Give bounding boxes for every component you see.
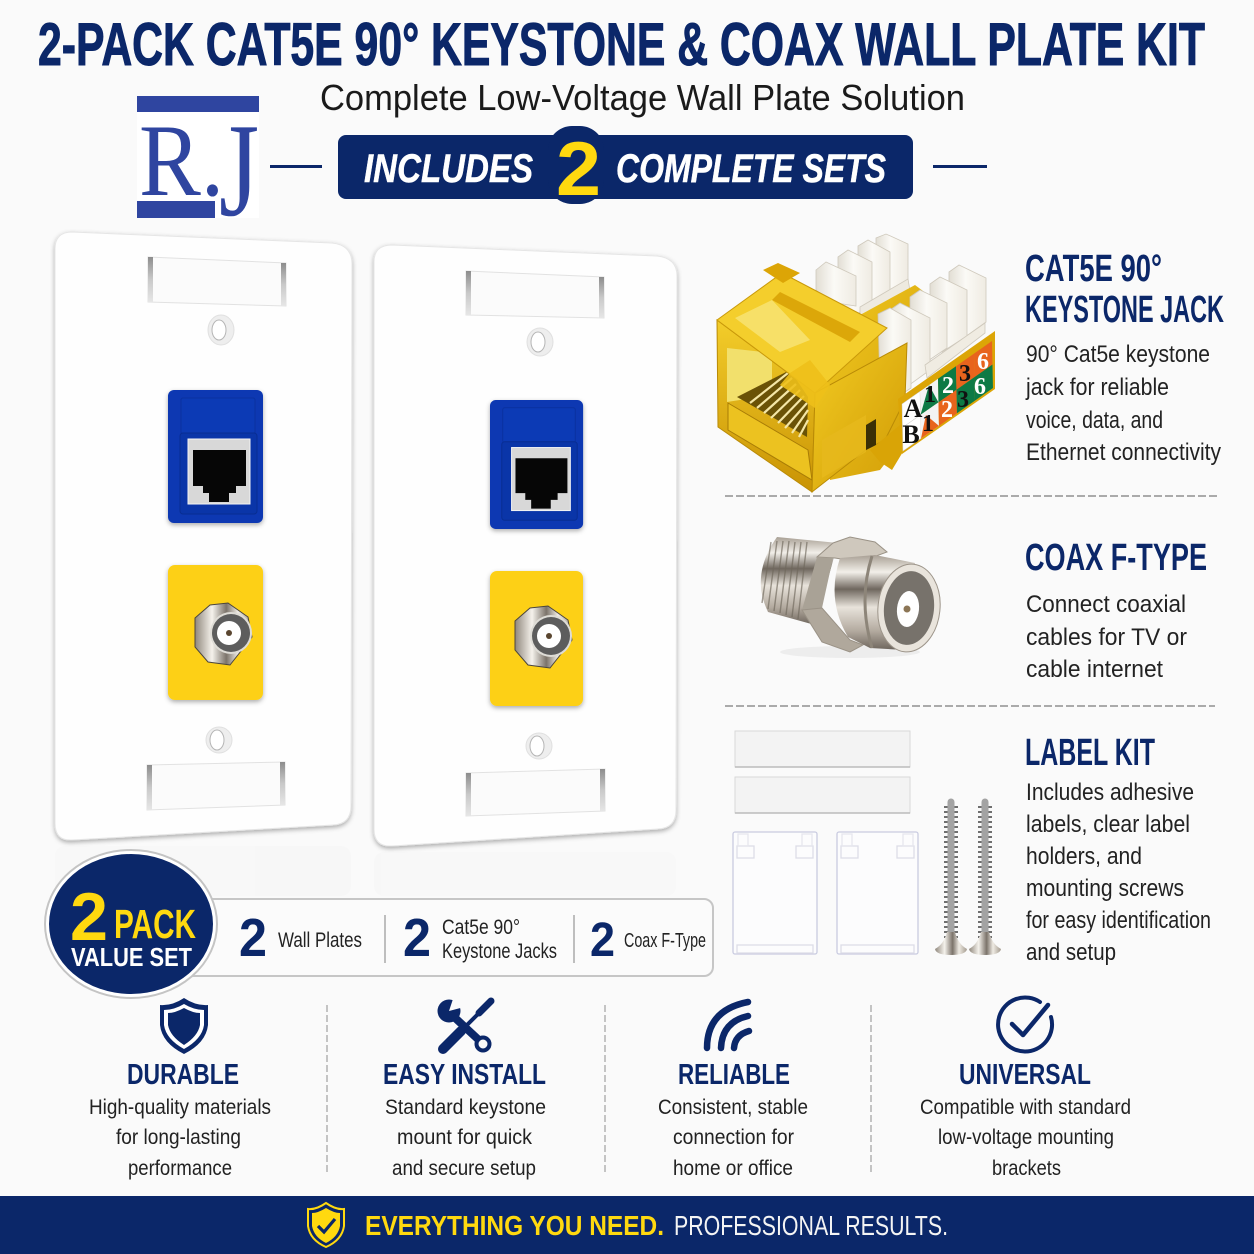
icon: wrench and screwdriver bbox=[438, 996, 491, 1050]
footer text bbox=[365, 1210, 948, 1241]
rear white punch-down blocks bbox=[816, 234, 910, 319]
item: keystone jacks: Cat5e 90° bbox=[442, 916, 520, 939]
banner: includes 2 complete sets bbox=[270, 126, 987, 212]
wiring label strip: A bbox=[904, 394, 923, 423]
text: Consistent, stable bbox=[658, 1096, 808, 1119]
item: wall plates: Wall Plates bbox=[278, 929, 362, 952]
heading: UNIVERSAL bbox=[959, 1059, 1091, 1091]
blue keystone jack bbox=[490, 400, 583, 529]
jack rear body bbox=[815, 285, 935, 480]
icon: signal waves bbox=[707, 1002, 749, 1048]
text: coax description: cable internet bbox=[1026, 656, 1163, 683]
feature: universal bbox=[920, 997, 1131, 1180]
illustration: clear label holders bbox=[733, 832, 918, 954]
lower front sill bbox=[728, 403, 812, 480]
front face with opening bbox=[717, 320, 815, 492]
item: keystone jacks: 2 bbox=[403, 908, 431, 968]
wiring label strip: 3 bbox=[959, 361, 971, 387]
text: Compatible with standard bbox=[920, 1096, 1131, 1119]
top face bbox=[717, 273, 887, 393]
cylinder body bbox=[835, 555, 915, 650]
screw hole top bbox=[208, 315, 234, 345]
front white punch-down blocks bbox=[878, 265, 986, 392]
heading: label kit: LABEL KIT bbox=[1025, 732, 1155, 774]
wiring label strip: 6 bbox=[977, 349, 989, 375]
illustration: coax F-type connector bbox=[761, 537, 944, 658]
label window bottom bbox=[147, 762, 285, 810]
item: wall plates bbox=[239, 908, 362, 968]
text bbox=[89, 1096, 271, 1180]
right side wall bbox=[812, 343, 907, 492]
text bbox=[385, 1096, 546, 1180]
item: coax F-type: 2 bbox=[590, 914, 615, 967]
blue keystone jack bbox=[168, 390, 263, 523]
item: coax F-type: Coax F-Type bbox=[624, 930, 706, 952]
text: and secure setup bbox=[392, 1157, 536, 1180]
text: Standard keystone bbox=[385, 1096, 546, 1119]
banner: includes 2 complete sets: COMPLETE SETS bbox=[616, 147, 886, 191]
subtitle: Complete Low-Voltage Wall Plate Solution bbox=[320, 77, 965, 118]
threaded barrel bbox=[761, 537, 838, 625]
item: keystone jacks: Keystone Jacks bbox=[442, 940, 557, 963]
wall plate 1 bbox=[55, 232, 352, 840]
text: label kit description bbox=[1026, 779, 1211, 966]
wiring label strip: 6 bbox=[974, 374, 986, 400]
label window bottom bbox=[466, 769, 605, 816]
illustration: adhesive labels bbox=[735, 731, 910, 813]
icon: shield bbox=[160, 998, 208, 1054]
text: keystone jack description: jack for reliable bbox=[1025, 374, 1169, 401]
text: label kit description: for easy identification bbox=[1026, 907, 1211, 934]
text: label kit description: mounting screws bbox=[1026, 875, 1184, 902]
panel: kit contents bar bbox=[150, 899, 713, 976]
text: keystone jack description: Ethernet connectivity bbox=[1026, 439, 1221, 466]
label window top bbox=[148, 257, 286, 306]
item: keystone jacks bbox=[403, 908, 557, 968]
faint plate reflection bbox=[55, 846, 676, 896]
text: keystone jack description bbox=[1025, 341, 1221, 466]
footer text: EVERYTHING YOU NEED. bbox=[365, 1210, 664, 1241]
text: coax description: Connect coaxial bbox=[1026, 591, 1186, 618]
text: keystone jack description: voice, data, and bbox=[1026, 407, 1163, 434]
logo: R.J: R. bbox=[139, 104, 224, 218]
wiring label strip bbox=[898, 331, 995, 454]
banner: includes 2 complete sets: INCLUDES bbox=[364, 147, 533, 191]
hex nut bbox=[817, 537, 887, 562]
text bbox=[658, 1096, 808, 1180]
badge: 2 pack value set bbox=[45, 850, 217, 998]
wiring label strip: 2 bbox=[941, 397, 953, 423]
wiring label strip: 1 bbox=[924, 382, 936, 408]
text: low-voltage mounting bbox=[938, 1126, 1114, 1149]
logo: R.J bbox=[137, 96, 259, 244]
badge: 2 pack value set: PACK bbox=[114, 901, 196, 947]
badge: 2 pack value set: 2 bbox=[70, 879, 108, 955]
footer band bbox=[0, 1196, 1254, 1254]
label window top bbox=[466, 271, 604, 318]
feature: reliable bbox=[658, 1002, 808, 1180]
text: home or office bbox=[673, 1157, 793, 1180]
text: label kit description: holders, and bbox=[1026, 843, 1142, 870]
text: coax description bbox=[1026, 591, 1187, 683]
heading: EASY INSTALL bbox=[383, 1059, 546, 1091]
text bbox=[920, 1096, 1131, 1180]
icon: yellow shield check bbox=[308, 1203, 344, 1247]
illustration: yellow Cat5e keystone jack bbox=[717, 234, 995, 492]
gold contacts bbox=[737, 370, 808, 437]
text: coax description: cables for TV or bbox=[1026, 624, 1187, 651]
wiring label strip: 1 bbox=[922, 411, 934, 437]
text: performance bbox=[128, 1157, 232, 1180]
feature: easy install bbox=[383, 996, 546, 1180]
item: wall plates: 2 bbox=[239, 908, 267, 968]
text: label kit description: Includes adhesive bbox=[1026, 779, 1194, 806]
heading: RELIABLE bbox=[678, 1059, 790, 1091]
text: connection for bbox=[673, 1126, 794, 1149]
heading: DURABLE bbox=[127, 1059, 239, 1091]
wiring label strip: 3 bbox=[957, 387, 969, 413]
logo: R.J: J bbox=[219, 96, 259, 244]
front disc bbox=[874, 561, 944, 655]
text: brackets bbox=[992, 1157, 1061, 1180]
banner: includes 2 complete sets: 2 bbox=[556, 127, 601, 212]
feature: durable bbox=[89, 998, 271, 1180]
yellow coax module bbox=[168, 565, 263, 700]
illustration: mounting screws bbox=[935, 802, 1001, 955]
text: label kit description: and setup bbox=[1026, 939, 1116, 966]
footer text: PROFESSIONAL RESULTS. bbox=[674, 1210, 948, 1241]
badge: 2 pack value set: VALUE SET bbox=[71, 942, 192, 972]
text: for long-lasting bbox=[116, 1126, 241, 1149]
wall plate 2 bbox=[374, 245, 677, 846]
screw hole bottom bbox=[526, 733, 552, 759]
wiring label strip: B bbox=[902, 420, 920, 449]
heading: Cat5e 90 keystone jack bbox=[1025, 248, 1224, 331]
column dividers bbox=[327, 1005, 871, 1175]
icon: check circle bbox=[998, 997, 1052, 1051]
text: label kit description: labels, clear label bbox=[1026, 811, 1190, 838]
text: keystone jack description: 90° Cat5e keystone bbox=[1026, 341, 1210, 368]
heading: Cat5e 90 keystone jack: CAT5E 90° bbox=[1025, 248, 1162, 290]
text: High-quality materials bbox=[89, 1096, 271, 1119]
text: mount for quick bbox=[397, 1126, 532, 1149]
wiring label strip: 2 bbox=[942, 373, 954, 399]
item: coax F-type bbox=[590, 914, 706, 967]
screw hole top bbox=[527, 328, 553, 356]
yellow coax module bbox=[490, 571, 583, 706]
screw hole bottom bbox=[206, 727, 232, 753]
